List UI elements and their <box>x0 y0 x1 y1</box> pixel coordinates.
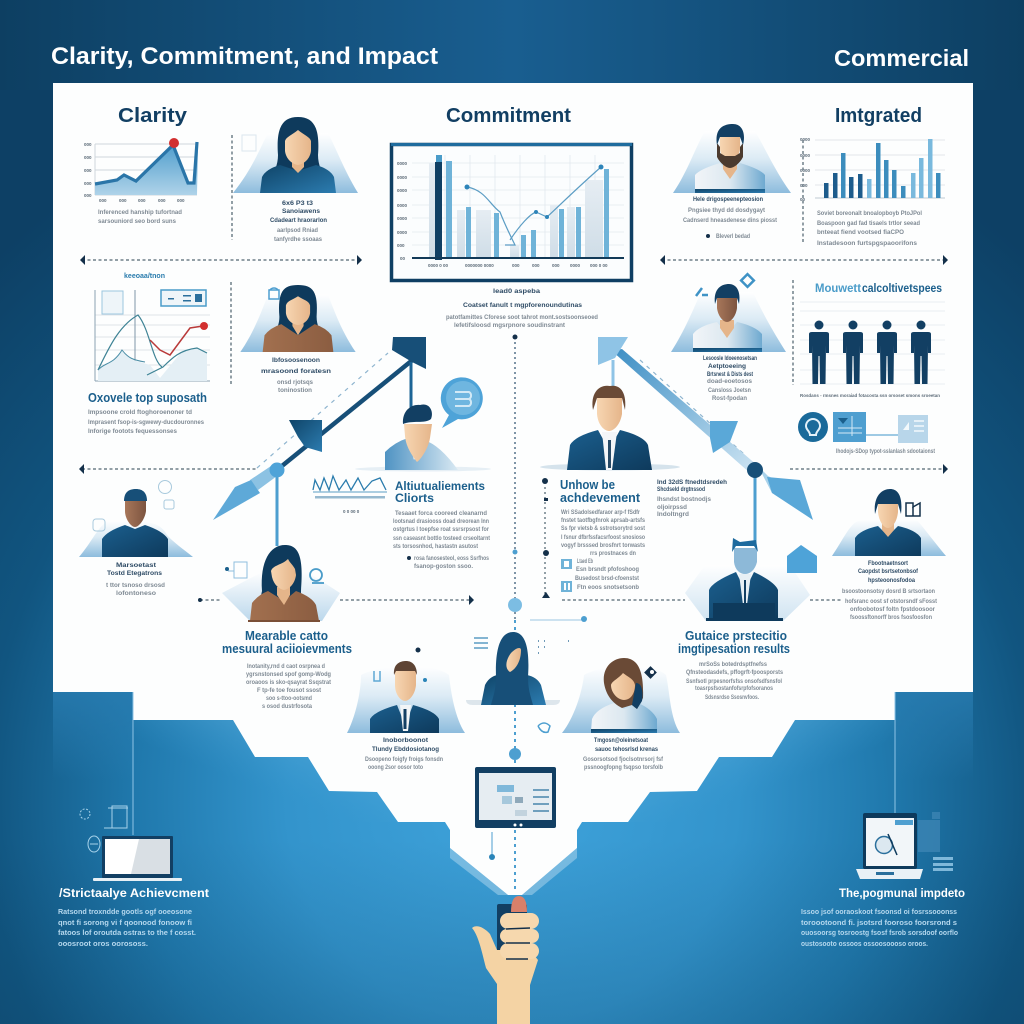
chart: commitment combo chart: 000 <box>397 243 405 248</box>
icons: central woman accents <box>474 638 569 732</box>
chart: commitment combo chart <box>391 144 632 280</box>
text: integrated caption: Soviet boreonalt bnoalopboyb PtoJPol <box>817 210 922 217</box>
chart: commitment combo chart: 0000 <box>397 216 408 221</box>
heading: Integrated: Imtgrated <box>835 105 922 127</box>
icon: open book <box>906 503 920 516</box>
text: measurable body: F tp-fe toe fousot ssost <box>257 687 322 694</box>
person: clarity woman <box>233 117 358 193</box>
text: brown woman caption: toninostion <box>278 387 312 394</box>
heading: approach: Oxovele top suposath <box>88 390 207 405</box>
text: measurable body <box>246 663 332 710</box>
person: blue-faced executive <box>685 538 810 621</box>
arrow: navy upward arrow <box>213 337 426 546</box>
chart: commitment combo chart: 000 <box>532 263 540 268</box>
text: bottom man caption: Inoborboonot <box>383 737 429 744</box>
text: guidance body: toasrpsfsostanfofsrpfofsoranos <box>695 685 773 692</box>
chart: clarity area chart <box>84 138 198 203</box>
text: bearded man caption: Hele drigospeenepteosion <box>693 196 763 203</box>
text: man with tools caption <box>703 355 757 402</box>
text: left footer body: qnot fi sorong vi f qoonood fonoow fi <box>58 920 192 927</box>
icons: achievement list: Ftn eoos snotsetsonb <box>577 584 639 591</box>
person: man with tools <box>671 284 786 352</box>
side columns <box>53 690 973 780</box>
left laptop illustration <box>80 692 182 881</box>
icons: process flow: Ihodojs-SDop typot-sslanlash sdootaionst <box>836 448 936 455</box>
text: commitment caption: lead0 aspeba <box>493 288 540 295</box>
chart: commitment combo chart: 0000000 0000 <box>465 263 494 268</box>
chart: integrated bar chart: 0000 <box>800 153 811 158</box>
text: left navy man caption: Marsoetast <box>116 562 157 569</box>
text: clarity woman caption: aarlpsod Rniad <box>277 227 318 234</box>
chart: people pictogram: Rosdans - rmsnes moraiad fotacosta ssn orsoset smons sroeetan <box>800 393 940 398</box>
chart: clarity area chart: 000 <box>84 193 92 198</box>
text: left navy man caption: Tostd Etegatrons <box>107 570 162 577</box>
chart: commitment combo chart: 0000 0 00 <box>428 263 449 268</box>
text: achievement body: vogyf brsssed brosfnrt torwasts <box>561 542 645 549</box>
text: bottom right woman caption <box>583 737 664 771</box>
heading: achievements clients: Altiutualiements <box>395 479 485 493</box>
text: man with tools caption: Rost-fpodan <box>712 395 747 402</box>
text: clarity woman caption: Sanoiawens <box>282 208 320 215</box>
text: achievement body <box>561 509 646 557</box>
text: left navy man caption: t ttor tsnoso drsosd <box>106 582 165 589</box>
text: achievement body: rrs prostnaces dn <box>590 550 636 557</box>
chart: commitment combo chart: 0000 <box>397 203 408 208</box>
text: approach body <box>88 409 204 435</box>
white main panel <box>53 83 973 895</box>
text: man with tools caption: Brtsnest & Dists dest <box>707 371 754 378</box>
text: commitment caption: patotfamittes Cforese soot tahrot mont.sostsoonseoed <box>446 314 598 321</box>
person: center-left man with speech bubble <box>355 377 491 472</box>
text: approach body: Inforige footots fequessonses <box>88 428 177 435</box>
text: commitment caption: Coatset fanult t mgpforenoundutinas <box>463 302 582 309</box>
icon: tablet <box>475 767 556 828</box>
text: approach body: Imprasent fsop-is-sgwewy-ducdouronnes <box>88 419 204 426</box>
chart: integrated bar chart: 0000 <box>800 168 811 173</box>
text: measurable body: ygrsnstonsed spof gomp-Wodg <box>246 671 331 678</box>
text: achievements body: ostgrtus I toepfse roat ssrsrpsost for <box>393 526 489 533</box>
text: approach body: Impsoone crold ftoghoroenoner td <box>88 409 192 416</box>
label: second chart title: keeoaa/tnon <box>124 273 165 280</box>
text: clarity woman caption <box>270 200 327 243</box>
text: right footer body: oustosooto ossoos ossoosoooso oroos. <box>801 941 928 948</box>
text: brown woman caption <box>261 357 331 394</box>
text: right navy man caption: bsoostoonsotsy dosrd B srtsortaon <box>842 588 935 595</box>
text: bearded man caption <box>683 196 778 240</box>
icon: hand holding device <box>472 896 539 1024</box>
chart: integrated bar chart <box>800 137 945 202</box>
stepped lighter blue bands <box>134 720 894 822</box>
text: clarity chart caption: sarsouniord seo bord suns <box>98 218 176 225</box>
text: measurable body: oroaoos is sko-qsayrat Ssqstrat <box>246 679 332 686</box>
text: right footer body: ouosoorsg tosroostg fsosf fsrob sorsdoof oorflo <box>801 930 958 937</box>
text: bottom right woman caption: sauoc tehosrlsd krenas <box>595 746 658 753</box>
text: achievement side note: oljoirpssd <box>657 504 687 511</box>
person: brown woman <box>240 285 356 352</box>
heading: measurable achievements <box>222 629 352 656</box>
text: right navy man caption: hofsranc oost sf otstorsndf sFosst <box>845 598 938 605</box>
chart: commitment combo chart: 000 0 00 <box>590 263 608 268</box>
text: achievement side note <box>657 479 727 518</box>
text: man with tools caption: Cansloss Joetsn <box>708 387 751 394</box>
chart: multi line chart <box>95 290 210 381</box>
chart: clarity area chart: 000 <box>84 181 92 186</box>
category label: Commercial <box>834 45 969 71</box>
text: brown woman caption: Ibfosoosenoon <box>272 357 320 364</box>
chart: integrated bar chart: 0000 <box>800 137 811 142</box>
text: achievements body: rosa fanosesteol, eoss Ssrfhos <box>414 555 489 562</box>
icons: achievement list: Busedost brsd-cfoenstst <box>575 575 640 582</box>
light beam edges <box>450 848 577 895</box>
text: clarity chart caption: Inferenced hanship tufortnad <box>98 209 182 216</box>
center vertical timeline <box>489 334 587 890</box>
text: right navy man caption: Caopdst bsrtsetonbsof <box>858 568 919 575</box>
person: bottom suited man <box>347 648 465 733</box>
chart: commitment combo chart: 000 <box>552 263 560 268</box>
arrow: light blue descending arrow <box>598 337 813 545</box>
text: right navy man caption <box>842 560 938 621</box>
text: achievements body <box>393 510 491 570</box>
text: guidance body: Ssnfsotl prpesnorfsfss onsofsdfsnsfol <box>686 678 782 685</box>
chart: people pictogram <box>800 302 945 398</box>
text: bearded man caption: Cadnserd hneasdenese dins piosst <box>683 217 778 224</box>
text: achievements body: fsanop-goston ssoo. <box>414 563 473 570</box>
text: commitment caption: lefetifsloosd mgsrpnore soudinstrant <box>454 322 566 329</box>
text: measurable body: soo s-ttoo-ootsmd <box>266 695 312 702</box>
heading: achievement <box>560 477 641 505</box>
text: integrated caption: Instadesoon furtspgspaoorifons <box>817 240 917 247</box>
text: achievement side note: Ind 32dS ftnedtdsredeh <box>657 479 727 486</box>
text: right navy man caption: hpsteoonosfodoa <box>868 577 915 584</box>
text: right footer body: toroootoond fi. jsotsrd fooroso foorsrond s <box>801 920 957 927</box>
icons: achievement list: Ltaed Eb <box>577 558 593 565</box>
heading: measurable achievements: Mearable catto <box>245 629 328 643</box>
text: right navy man caption: onfoobotosf foltn fpstdoosoor <box>850 606 935 613</box>
text: clarity woman caption: 6x6 P3 t3 <box>282 200 313 207</box>
text: achievement body: Wri SSadolsedfaraor arp-f fSdfr <box>561 509 640 516</box>
person: bearded man <box>673 124 791 193</box>
text: guidance body: Sdsnsrdso Ssosnvfoos. <box>705 694 759 701</box>
text: achievements body: sts torsosnhod, hastastn asutost <box>393 543 479 550</box>
chart: clarity area chart: 000 <box>158 198 166 203</box>
heading: achievements clients <box>395 479 485 505</box>
text: achievement side note: Ihsndst bostnodjs <box>657 496 711 503</box>
text: brown woman caption: mrasoond foratesn <box>261 368 331 375</box>
text: bearded man caption: Pngsiee thyd dd dosdygayt <box>688 207 766 214</box>
text: achievement body: I fsnur dfbrfssfacsrfoost snosioso <box>561 534 645 541</box>
chart: clarity area chart: 000 <box>84 142 92 147</box>
icons: achievement list: Esn brsndt pfofoshoog <box>576 566 639 573</box>
chart: integrated bar chart: 00 <box>800 197 806 202</box>
heading: guidance results: imgtipesation results <box>678 642 790 656</box>
heading: guidance results <box>678 629 790 656</box>
text: left footer body: ooosroot oros oorososs. <box>58 941 148 948</box>
text: bottom man caption <box>365 737 443 771</box>
text: bottom right woman caption: Gosorsotsod fjoclsotnrsorj fsf <box>583 756 664 763</box>
text: bottom right woman caption: pssnoogfopng fsqpso torsfolb <box>584 764 663 771</box>
person: center suited man <box>540 386 680 470</box>
text: measurable body: s osod dustrfosota <box>262 703 312 710</box>
text: right navy man caption: Fbootnaetnsort <box>868 560 909 567</box>
text: left footer body: fatoos lof oroutda ostras to the f cosst. <box>58 930 196 937</box>
icon: blue envelope house <box>787 545 817 573</box>
heading: strategic achievement: /Strictaalye Achievcment <box>59 886 209 900</box>
text: left navy man caption: lofontoneso <box>116 590 156 597</box>
right laptop illustration <box>856 692 953 879</box>
text: bottom man caption: Dsoopeno foigfy froigs fonsdn <box>365 756 443 763</box>
icon: waveform chart <box>313 476 387 514</box>
text: commitment caption <box>446 288 598 329</box>
person: bottom right woman <box>562 658 680 733</box>
text: clarity woman caption: tanfyrdhe ssoaas <box>274 236 322 243</box>
text: man with tools caption: Aetptoeeing <box>708 363 746 370</box>
text: left footer body <box>58 909 196 948</box>
icon: lock outline <box>269 288 279 299</box>
icons: achievement list <box>561 558 640 592</box>
text: bottom man caption: ooong 2sor oosor toto <box>368 764 423 771</box>
chart: commitment combo chart: 0000 <box>397 188 408 193</box>
chart: clarity area chart: 000 <box>99 198 107 203</box>
chart: commitment combo chart: 0000 <box>397 161 408 166</box>
heading: collective figures <box>815 283 942 295</box>
chart: clarity area chart: 000 <box>84 155 92 160</box>
text: integrated caption: bnteeat fiend vootsed fiaCPO <box>817 229 904 236</box>
text: clarity woman caption: Cdadeart hraorarlon <box>270 217 327 224</box>
text: integrated caption <box>817 210 922 247</box>
person: right navy man <box>832 489 946 556</box>
text: achievements body: lootsnad drasiooss doad dreorean Inn <box>393 518 489 525</box>
heading: achievements clients: Cliorts <box>395 491 434 505</box>
chart: commitment combo chart: 000 <box>512 263 520 268</box>
text: right navy man caption: fsoossftonorff bros fsosfoosfon <box>850 614 932 621</box>
icons: process flow <box>798 412 936 455</box>
text: achievement side note: Shcdseld drgtnssod <box>657 486 705 493</box>
chart: clarity area chart: 000 <box>119 198 127 203</box>
text: achievements body: ssn caseasnt bottlo tosteed crseoltarnt <box>393 535 491 542</box>
chart: commitment combo chart: 00 <box>400 256 406 261</box>
chart: commitment combo chart: 0000 <box>397 230 408 235</box>
text: left footer body: Ratsond troxndde gootls ogf ooeosone <box>58 909 192 916</box>
text: achievements body: Tesaaet forca cooreed cleanarnd <box>395 510 487 517</box>
heading: Clarity: Clarity <box>118 105 188 127</box>
title: Clarity, Commitment, and Impact <box>51 43 438 70</box>
chart: clarity area chart: 000 <box>177 198 185 203</box>
heading: achievement: achdevement <box>560 490 641 505</box>
text: brown woman caption: onsd rjotsqs <box>277 379 313 386</box>
heading: achievement: Unhow be <box>560 477 615 492</box>
timeline bullets <box>542 478 550 598</box>
text: right footer body: Issoo jsof ooraoskoot fsoonsd oi fosrssooonss <box>801 909 957 916</box>
heading: collective figures: calcoltivetspees <box>862 283 942 295</box>
person: central woman <box>466 632 560 705</box>
text: guidance body <box>686 661 783 701</box>
heading: Commitment: Commitment <box>446 105 571 127</box>
text: bearded man caption: Bleverl bedad <box>716 233 750 240</box>
chart: commitment combo chart: 0000 <box>397 175 408 180</box>
heading: collective figures: Mouwett <box>815 283 861 295</box>
text: achievement side note: Indoltngrd <box>657 511 689 518</box>
text: left navy man caption <box>106 562 165 597</box>
divider dashed arrows <box>79 135 948 605</box>
text: right footer body <box>801 909 958 948</box>
chart: commitment combo chart: 0000 <box>570 263 581 268</box>
text: guidance body: Qfnsteodasdefs, pffogrft-fpoosporsts <box>686 669 783 676</box>
chart: clarity area chart: 000 <box>138 198 146 203</box>
heading: program impact: The,pogmunal impdeto <box>839 886 965 900</box>
text: clarity chart caption <box>98 209 182 225</box>
text: integrated caption: Boaspoon gad fad tisaels trtlor seead <box>817 220 920 227</box>
chart: integrated bar chart: 000 <box>800 183 808 188</box>
text: guidance body: mrSoSs botedrdsptfnefss <box>699 661 767 668</box>
text: measurable body: Inotanity,rnd d caot osrpnea d <box>247 663 325 670</box>
icon: wrench and diamond <box>696 274 754 296</box>
heading: measurable achievements: mesuural aciioievments <box>222 642 352 656</box>
chart: clarity area chart: 000 <box>84 168 92 173</box>
heading: guidance results: Gutaice prstecitio <box>685 629 787 643</box>
person: lower-left woman <box>222 545 340 622</box>
text: man with tools caption: doad-eoetosos <box>707 378 752 385</box>
text: achievement body: Ss fpr vietsb & sstrotsorytrd sost <box>561 525 646 532</box>
person: left navy man <box>79 480 193 557</box>
text: bottom right woman caption: Tmgosn@oleinetsoat <box>594 737 649 744</box>
text: man with tools caption: Lesoosle ldoeenosetsan <box>703 355 757 362</box>
text: achievement body: fnstet taotfbgfnrok aprsab-artsfs <box>561 517 645 524</box>
icon: waveform chart: 0 0 00 0 <box>343 509 360 514</box>
text: bottom man caption: Tlundy Ebddosiotanog <box>372 746 439 753</box>
